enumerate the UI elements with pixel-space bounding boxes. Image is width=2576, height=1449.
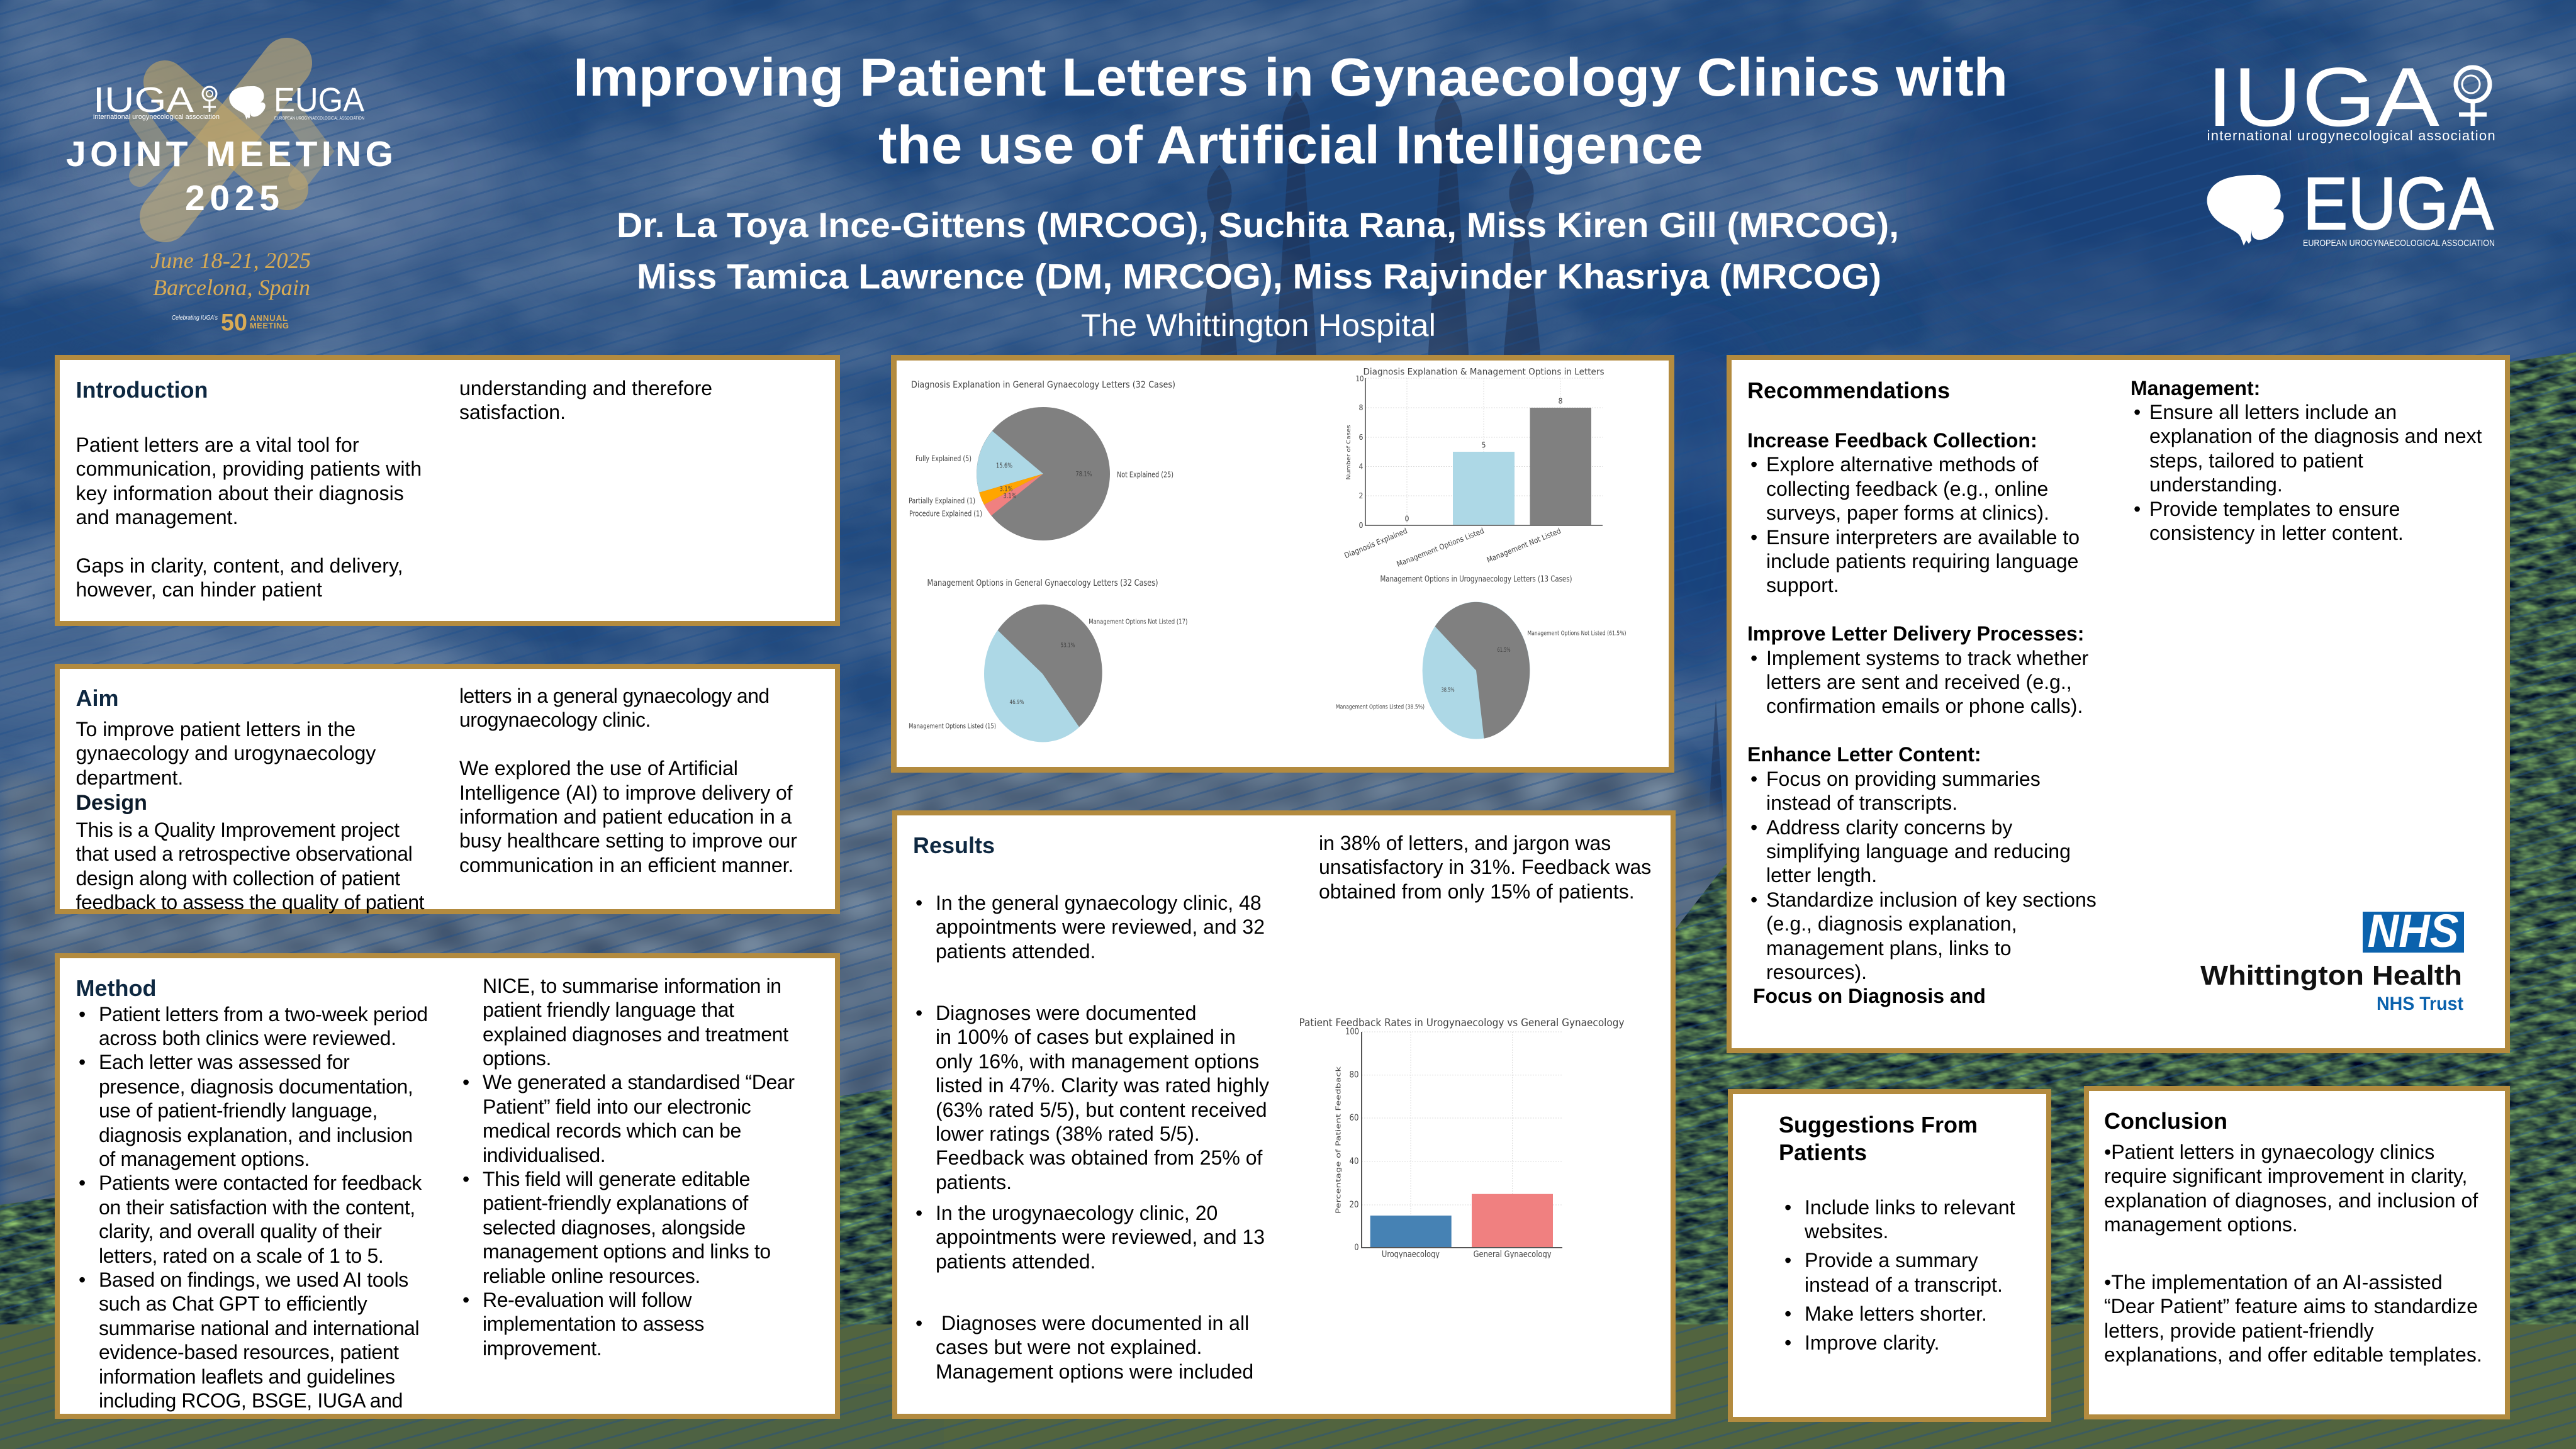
joint meeting logo: Celebrating IUGA's [172,315,218,322]
chart: diagnosis explanation pie: Partially Explained (1) [909,496,975,505]
chart: patient feedback rates: 60 [1349,1113,1359,1123]
text: introduction body: key information about their diagnosis [76,482,404,505]
text: recommendations list: include patients requiring language [1766,550,2078,573]
text: method steps, first column: use of patient-friendly language, [99,1099,378,1122]
chart: diagnosis explanation pie: 3.1% [999,484,1013,493]
text: recommendations list: Enhance Letter Content: Focus on Diagnosis and [1747,743,1986,1007]
text: method steps, second column: explained diagnoses and treatment [483,1023,788,1046]
text: conclusion second point: “Dear Patient” feature aims to standardize [2104,1295,2478,1318]
title: the use of Artificial Intelligence [878,116,1703,175]
text: method steps, second column: reliable online resources. [483,1265,700,1287]
chart: management options pie, urogynaecology [1336,575,1627,739]
text: conclusion second point [2104,1270,2482,1367]
text: recommendations list: Address clarity concerns by [1766,815,2012,838]
text: general clinic findings: Diagnoses were documented [936,1002,1196,1024]
text: design continued: information and patient education in a [459,805,792,828]
text: method steps, first column: of management options. [99,1148,310,1170]
chart: management options pie, general gynaecology: 46.9% [1009,699,1024,706]
text: aim body: department. [76,766,183,789]
text: aim body: gynaecology and urogynaecology [76,742,376,764]
text: aim body [76,718,376,789]
chart: diagnosis explanation pie: Fully Explained (5) [916,454,972,463]
text: general clinic findings: only 16%, with management options [936,1050,1259,1073]
chart: diagnosis explanation pie: 3.1% [1003,492,1017,500]
text: method steps, second column: individualised. [483,1144,605,1166]
chart: patient feedback rates: Percentage of Patient Feedback [1334,1066,1343,1214]
joint meeting logo: EUROPEAN UROGYNAECOLOGICAL ASSOCIATION [274,116,364,121]
text: introduction body: Patient letters are a vital tool for [76,434,359,456]
text: recommendations list: • [1750,888,1757,911]
text: recommendations list: • [1750,453,1757,476]
chart: diagnosis explanation pie [909,380,1175,540]
text: general clinic findings [936,1001,1269,1194]
text: recommendations list: • [1750,526,1757,549]
text: design body [76,819,424,914]
authors: Miss Tamica Lawrence (DM, MRCOG), Miss Rajvinder Khasriya (MRCOG) [637,257,1881,296]
heading: suggestions from patients: Suggestions From [1779,1111,1978,1138]
text: urogynaecology clinic appointments: In the urogynaecology clinic, 20 [936,1202,1218,1224]
text: method steps, second column [462,975,795,1360]
chart: patient feedback rates: 20 [1349,1200,1359,1210]
text: introduction continued: satisfaction. [459,401,566,423]
chart: diagnosis and management bars: 2 [1359,491,1363,500]
text: method steps, second column: selected diagnoses, alongside [483,1216,746,1239]
text: design continued: We explored the use of Artificial [459,757,738,780]
heading: aim: Aim [76,685,119,711]
text: method steps, second column: Re-evaluation will follow [483,1289,692,1311]
text: method steps, first column: evidence-based resources, patient [99,1341,399,1363]
panel: results: • [916,1202,922,1224]
panel: suggestions from patients [1728,1089,2051,1422]
text: general clinic findings: lower ratings (38% rated 5/5). [936,1122,1200,1145]
heading: suggestions from patients: Patients [1779,1139,1867,1165]
text: general clinic appointments: appointments were reviewed, and 32 [936,915,1265,938]
text: design continued: communication in an efficient manner. [459,854,793,876]
text: suggestion, clarity: Improve clarity. [1805,1331,1940,1354]
text: recommendations list: Ensure interpreters are available to [1766,526,2080,549]
chart: diagnosis and management bars: Number of Cases [1346,425,1352,479]
text: method steps, first column: such as Chat GPT to efficiently [99,1292,367,1315]
joint meeting logo [66,63,393,336]
text: management recommendations: • [2134,401,2141,423]
chart: patient feedback rates [1299,1017,1625,1260]
text: method steps, second column: management options and links to [483,1240,771,1263]
joint meeting logo: June 18-21, 2025 [150,248,311,273]
text: design continued: urogynaecology clinic. [459,708,651,731]
panel: method: • [79,1051,86,1073]
text: method steps, first column: information leaflets and guidelines [99,1365,395,1388]
chart: diagnosis and management bars: Diagnosis Explanation & Management Options in Letters [1363,367,1604,378]
text: general clinic findings: Feedback was obtained from 25% of [936,1146,1262,1169]
text: method steps, first column: clarity, and overall quality of their [99,1220,382,1243]
text: management recommendations: understanding. [2149,473,2283,496]
authors [617,205,1899,296]
joint meeting logo: international urogynecological association [93,113,220,121]
text: management recommendations: explanation of the diagnosis and next [2149,425,2482,447]
chart: diagnosis and management bars: 4 [1359,462,1363,471]
text: recommendations list: Implement systems to track whether [1766,647,2088,669]
text: method steps, second column: improvement. [483,1337,602,1360]
gold X emblem [140,63,321,217]
joint meeting logo: JOINT MEETING [66,134,393,174]
text: recommendations list: • [1750,647,1757,669]
panel: results: • [916,892,922,914]
panel: suggestions from patients: • [1784,1249,1791,1272]
chart: diagnosis and management bars: 0 [1359,521,1363,530]
logo: NHS Whittington Health [2200,905,2464,1014]
text: method steps, first column: presence, diagnosis documentation, [99,1075,413,1098]
text: conclusion first point: explanation of diagnoses, and inclusion of [2104,1189,2478,1212]
text: design body: feedback to assess the quality of patient [76,891,424,914]
panel: results: • [916,1312,922,1334]
joint meeting logo: 2025 [185,178,279,218]
joint meeting logo: 50 [221,310,247,336]
heading: introduction: Introduction [76,377,208,403]
text: conclusion second point: •The implementation of an AI-assisted [2104,1271,2443,1294]
panel: method: • [462,1071,469,1094]
heading: recommendations: Recommendations [1747,378,1950,403]
text: method steps, second column: This field will generate editable [483,1168,750,1190]
panel: charts [891,355,1674,773]
text: design continued [459,685,797,876]
text: design continued: Intelligence (AI) to improve delivery of [459,781,792,804]
text: recommendations list: Explore alternative methods of [1766,453,2038,476]
text: method steps, first column: Patients were contacted for feedback [99,1172,422,1194]
cathedral spires [1201,91,1724,831]
text: suggestion, links: Include links to relevant [1805,1196,2015,1219]
chart: management options pie, urogynaecology: Management Options in Urogynaecology Letters (13 Cases) [1380,575,1572,584]
hospital name: The Whittington Hospital [1081,308,1436,343]
chart: management options pie, general gynaecology [909,578,1187,742]
text: urogynaecology clinic findings [936,1311,1253,1384]
text: introduction body: Gaps in clarity, content, and delivery, [76,554,403,577]
chart: patient feedback rates: 80 [1349,1070,1359,1080]
text: method steps, first column: summarise national and international [99,1317,419,1340]
text: conclusion first point: management options. [2104,1213,2298,1236]
panel: suggestions from patients: • [1784,1302,1791,1325]
text: recommendations list: Increase Feedback Collection: [1747,429,2037,452]
panel: recommendations [1727,355,2510,1053]
panel: method: • [79,1268,86,1291]
text: method steps, first column: Patient letters from a two-week period [99,1003,428,1026]
chart: diagnosis and management bars: 0 [1404,515,1409,523]
panel: suggestions from patients: • [1784,1331,1791,1354]
text: recommendations list: (e.g., diagnosis explanation, [1766,912,2017,935]
IUGA logo: international urogynecological association [2207,128,2495,143]
text: management recommendations: steps, tailored to patient [2149,449,2363,472]
chart: management options pie, general gynaecology: 53.1% [1061,642,1075,649]
text: urogynaecology clinic appointments [936,1201,1265,1273]
text: method steps, first column: on their satisfaction with the content, [99,1196,415,1219]
chart: management options pie, general gynaecology: Management Options Not Listed (17) [1089,618,1187,625]
chart: diagnosis and management bars: 8 [1359,403,1363,412]
text: recommendations list: simplifying language and reducing [1766,840,2071,863]
text: management recommendations: Management: [2131,376,2260,399]
text: method steps, second column: medical records which can be [483,1119,741,1142]
text: management recommendations: Provide templates to ensure [2149,498,2400,520]
text: design body: design along with collection of patient [76,867,400,890]
text: recommendations list: confirmation emails or phone calls). [1766,695,2083,717]
text: urogynaecology clinic appointments: patients attended. [936,1250,1095,1273]
text: suggestion, summary: instead of a transcript. [1805,1273,2003,1296]
chart: management options pie, urogynaecology: 38.5% [1441,687,1455,693]
text: urogynaecology clinic findings: cases but were not explained. [936,1336,1202,1358]
header: logos, title, authors [66,38,2495,343]
text: management recommendations: Ensure all letters include an [2149,401,2397,423]
chart: diagnosis and management bars: Diagnosis Explained [1343,527,1409,560]
text: management recommendations: consistency in letter content. [2149,522,2404,544]
text: recommendations list: • [1750,768,1757,790]
chart: diagnosis and management bars: 10 [1355,374,1364,383]
text: suggestion, summary: Provide a summary [1805,1249,1978,1272]
text: recommendations list [1747,428,2097,1009]
text: conclusion second point: letters, provide patient-friendly [2104,1319,2374,1342]
text: method steps, second column: Patient” field into our electronic [483,1095,751,1118]
text: suggestion, shorter: Make letters shorter. [1805,1302,1987,1325]
text: introduction body [76,434,422,601]
text: suggestion, links [1805,1195,2015,1244]
joint meeting logo: EUGA [274,81,364,119]
text: method steps, first column: Based on findings, we used AI tools [99,1268,408,1291]
panel: conclusion [2084,1086,2510,1419]
panel: method: • [462,1168,469,1190]
text: method steps, second column: patient-friendly explanations of [483,1192,748,1214]
text: general clinic findings: patients. [936,1171,1012,1194]
text: recommendations list: management plans, links to [1766,937,2012,959]
joint meeting logo: ANNUAL [250,313,288,323]
panel: suggestions from patients: • [1784,1196,1791,1219]
chart: management options pie, urogynaecology: 61.5% [1498,647,1510,654]
text: general clinic appointments: In the general gynaecology clinic, 48 [936,892,1262,914]
panel: method: • [462,1289,469,1311]
text: recommendations list: Focus on providing summaries [1766,768,2041,790]
chart: diagnosis explanation pie: 15.6% [996,462,1012,469]
text: introduction body: communication, providing patients with [76,457,422,480]
chart: diagnosis and management bars [1343,367,1604,569]
text: method steps, first column [79,1003,428,1412]
text: design body: This is a Quality Improvement project [76,819,400,841]
chart: diagnosis and management bars: Management Options Listed [1396,526,1486,569]
heading: method: Method [76,975,156,1001]
heading: results: Results [913,832,995,858]
EUGA logo: EUROPEAN UROGYNAECOLOGICAL ASSOCIATION [2303,238,2495,249]
text: recommendations list: • [1750,815,1757,838]
text: introduction continued [459,377,712,423]
chart: management options pie, urogynaecology: Management Options Not Listed (61.5%) [1528,630,1627,637]
chart: diagnosis and management bars: 5 [1481,441,1486,450]
text: recommendations list: instead of transcripts. [1766,792,1957,814]
text: suggestion, links: websites. [1805,1220,1888,1243]
chart: diagnosis explanation pie: 78.1% [1076,470,1092,478]
text: recommendations list: support. [1766,574,1839,596]
heading: design: Design [76,791,147,815]
logo: NHS Whittington Health: NHS [2367,905,2459,957]
text: method steps, first column: across both clinics were reviewed. [99,1027,396,1049]
text: conclusion first point [2104,1140,2478,1237]
text: results continued: in 38% of letters, and jargon was [1319,832,1611,854]
chart: diagnosis and management bars: 8 [1558,396,1563,405]
panel: method: • [79,1003,86,1026]
text: general clinic findings: (63% rated 5/5), but content received [936,1099,1267,1121]
logo: NHS Whittington Health: Whittington Health [2200,960,2462,991]
text: urogynaecology clinic appointments: appointments were reviewed, and 13 [936,1226,1265,1248]
EUGA logo: EUGA [2303,162,2494,245]
text: recommendations list: letter length. [1766,864,1877,887]
text: results continued: unsatisfactory in 31%. Feedback was [1319,856,1651,878]
chart: diagnosis explanation pie: Procedure Explained (1) [909,510,982,518]
text: aim body: To improve patient letters in the [76,718,356,741]
text: method steps, second column: implementation to assess [483,1312,704,1335]
authors: Dr. La Toya Ince-Gittens (MRCOG), Suchita Rana, Miss Kiren Gill (MRCOG), [617,205,1899,245]
logo: NHS Whittington Health: NHS Trust [2377,993,2463,1014]
text: urogynaecology clinic findings: Diagnoses were documented in all [941,1312,1249,1334]
joint meeting logo: MEETING [250,321,289,330]
text: introduction body: however, can hinder patient [76,578,322,601]
text: introduction body: and management. [76,506,238,529]
text: recommendations list: resources). [1766,961,1867,983]
joint meeting logo: IUGA [93,80,194,120]
text: general clinic findings: in 100% of cases but explained in [936,1026,1236,1048]
chart: management options pie, urogynaecology: Management Options Listed (38.5%) [1336,703,1425,711]
IUGA logo: IUGA [2207,51,2439,144]
chart: management options pie, general gynaecology: Management Options Listed (15) [909,722,996,730]
EUGA logo [2207,162,2495,249]
text: method steps, first column: letters, rated on a scale of 1 to 5. [99,1245,383,1267]
chart: diagnosis explanation pie: Not Explained (25) [1117,471,1173,479]
panel: aim and design [55,664,840,914]
panel: method: • [79,1172,86,1194]
panel: results: • [916,1002,922,1024]
panel: results [892,810,1676,1419]
text: management recommendations [2131,376,2482,545]
text: conclusion first point: •Patient letters in gynaecology clinics [2104,1141,2434,1163]
chart: management options pie, general gynaecology: Management Options in General Gynaecology Letters (32 Cases) [927,578,1158,588]
text: general clinic appointments: patients attended. [936,940,1095,963]
text: method steps, first column: Each letter was assessed for [99,1051,349,1073]
text: general clinic findings: listed in 47%. Clarity was rated highly [936,1074,1269,1097]
joint meeting logo: Barcelona, Spain [153,275,310,300]
chart: patient feedback rates: 100 [1345,1027,1359,1037]
title [573,48,2008,175]
title: Improving Patient Letters in Gynaecology Clinics with [573,48,2008,108]
text: method steps, first column: including RCOG, BSGE, IUGA and [99,1389,403,1412]
text: conclusion first point: require significant improvement in clarity, [2104,1165,2467,1187]
chart: diagnosis and management bars: Management Not Listed [1486,527,1562,564]
text: introduction continued: understanding and therefore [459,377,712,400]
text: method steps, first column: diagnosis explanation, and inclusion [99,1124,413,1146]
text: design continued: busy healthcare setting to improve our [459,829,797,852]
chart: patient feedback rates: 40 [1349,1156,1359,1166]
text: urogynaecology clinic findings: Management options were included [936,1360,1253,1383]
text: design continued: letters in a general gynaecology and [459,685,770,707]
text: recommendations list: letters are sent and received (e.g., [1766,671,2072,693]
text: results continued: obtained from only 15% of patients. [1319,880,1635,903]
heading: conclusion: Conclusion [2104,1108,2227,1134]
chart: diagnosis and management bars: 6 [1359,433,1363,442]
text: method steps, second column: options. [483,1047,551,1070]
text: method steps, second column: NICE, to summarise information in [483,975,781,997]
heading: suggestions from patients [1779,1111,1978,1167]
text: recommendations list: Improve Letter Delivery Processes: [1747,622,2084,645]
text: design body: that used a retrospective observational [76,842,412,865]
panel: introduction [55,355,840,626]
panel: method [55,953,840,1419]
text: management recommendations: • [2134,498,2141,520]
text: general clinic appointments [936,891,1265,963]
text: suggestion, summary [1805,1248,2003,1297]
text: recommendations list: collecting feedback (e.g., online [1766,478,2048,500]
chart: patient feedback rates: 0 [1354,1243,1359,1253]
text: method steps, second column: patient friendly language that [483,999,734,1021]
text: recommendations list: surveys, paper forms at clinics). [1766,501,2049,524]
text: results continued [1319,831,1651,904]
chart: diagnosis explanation pie: Diagnosis Explanation in General Gynaecology Letters (32 Cases) [911,380,1175,390]
text: conclusion second point: explanations, and offer editable templates. [2104,1343,2482,1366]
text: recommendations list: Standardize inclusion of key sections [1766,888,2097,911]
text: method steps, second column: We generated a standardised “Dear [483,1071,795,1094]
